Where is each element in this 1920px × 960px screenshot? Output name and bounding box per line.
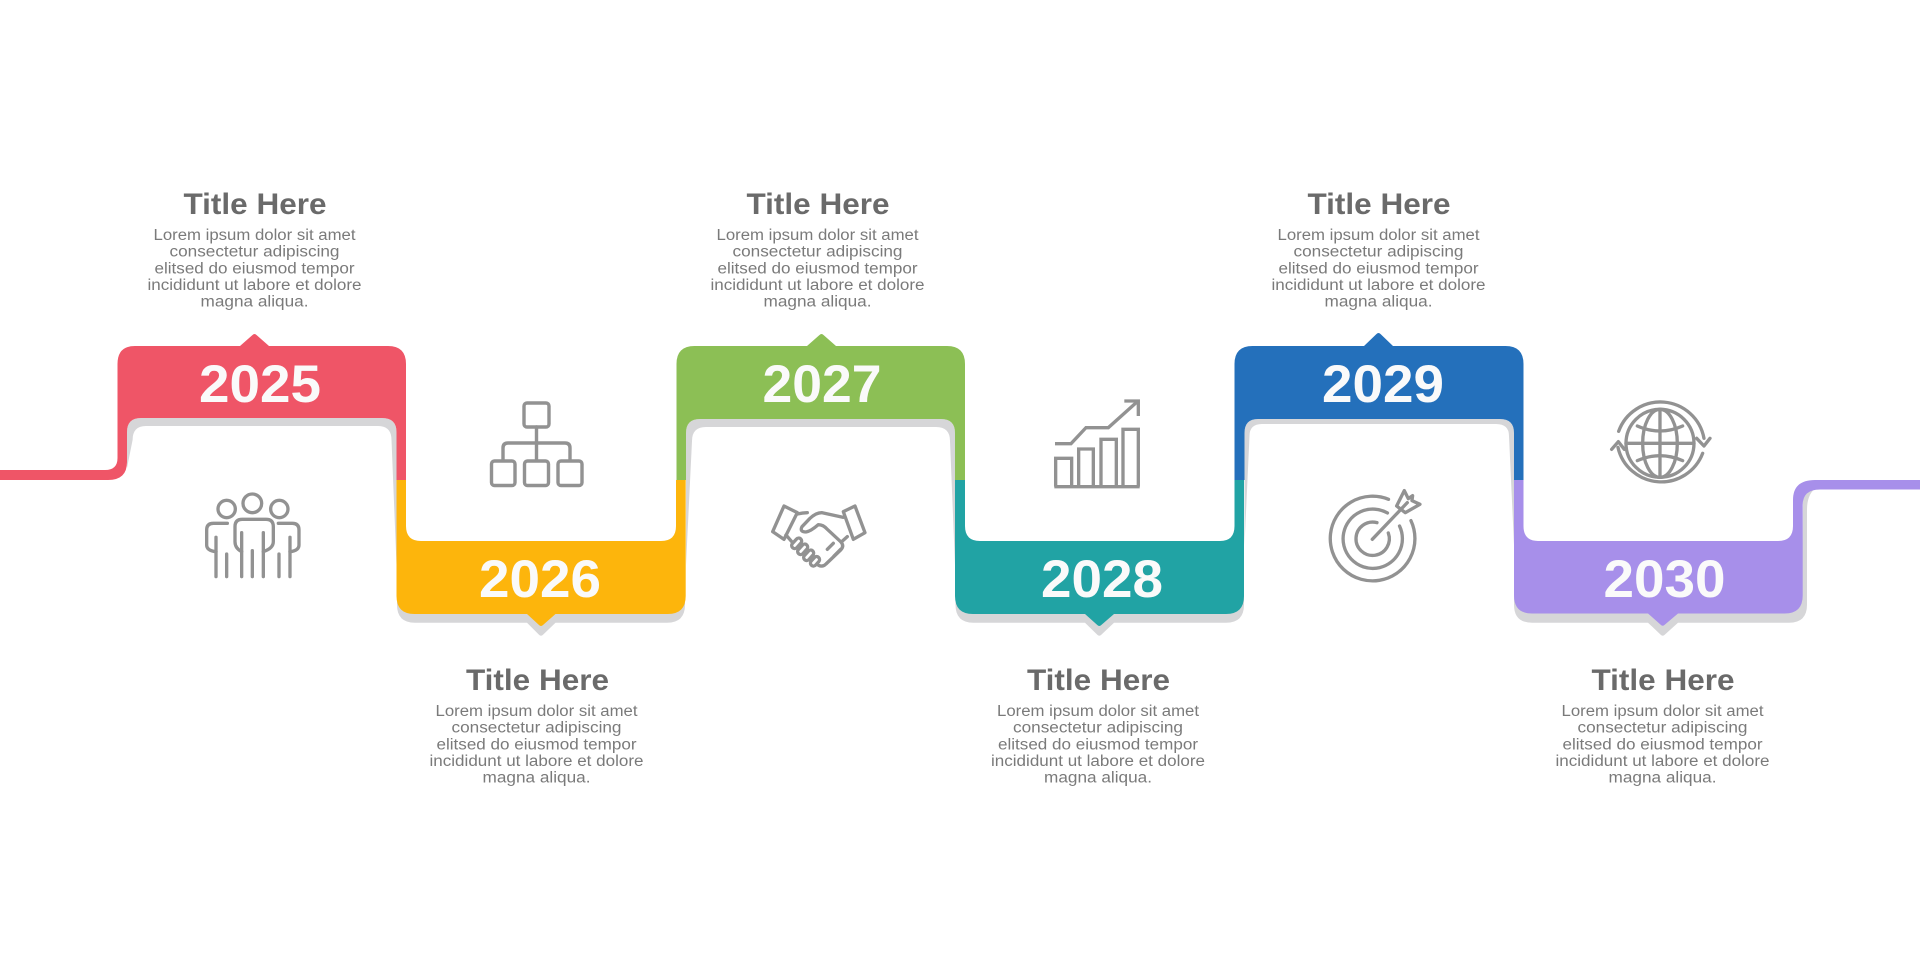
body 2025 xyxy=(148,227,362,311)
icon: handshake xyxy=(773,506,865,567)
body 2029: magna aliqua. xyxy=(1324,294,1432,311)
panel: 2025 step xyxy=(0,334,406,565)
body 2028: elitsed do eiusmod tempor xyxy=(998,736,1198,753)
text block 2030 xyxy=(1556,664,1770,787)
body 2026: incididunt ut labore et dolore xyxy=(430,753,644,770)
panel: 2030 step xyxy=(1514,480,1920,636)
body 2028: magna aliqua. xyxy=(1044,770,1152,787)
year 2025: 2025 xyxy=(199,355,321,414)
body 2028: consectetur adipiscing xyxy=(1013,720,1183,737)
body 2030: consectetur adipiscing xyxy=(1578,720,1748,737)
panel: 2029 step xyxy=(1234,333,1524,545)
body 2027: magna aliqua. xyxy=(764,294,872,311)
body 2026: elitsed do eiusmod tempor xyxy=(436,736,636,753)
body 2025: consectetur adipiscing xyxy=(170,244,340,261)
body 2028 xyxy=(991,703,1205,787)
year 2026: 2026 xyxy=(479,550,601,609)
text block 2027 xyxy=(710,188,924,311)
body 2025: incididunt ut labore et dolore xyxy=(148,277,362,294)
body 2029: incididunt ut labore et dolore xyxy=(1272,277,1486,294)
body 2030: elitsed do eiusmod tempor xyxy=(1562,736,1762,753)
text block 2025 xyxy=(148,188,362,311)
body 2027: Lorem ipsum dolor sit amet xyxy=(716,227,919,244)
icon: people group xyxy=(207,494,299,577)
shadow under 2028 ribbon xyxy=(956,596,1244,636)
body 2029: elitsed do eiusmod tempor xyxy=(1278,260,1478,277)
panel: 2028 step xyxy=(955,480,1244,636)
body 2027: elitsed do eiusmod tempor xyxy=(718,260,918,277)
text block 2029 xyxy=(1272,188,1486,311)
body 2030 xyxy=(1556,703,1770,787)
blue ribbon 2029 xyxy=(1234,333,1524,480)
teal ribbon 2028 xyxy=(955,480,1244,626)
text block 2026 xyxy=(430,664,644,787)
body 2026: consectetur adipiscing xyxy=(452,720,622,737)
icon: growth chart xyxy=(1054,401,1140,487)
body 2025: magna aliqua. xyxy=(200,294,308,311)
heading 2030: Title Here xyxy=(1592,664,1734,697)
purple ribbon 2030 xyxy=(1514,480,1920,626)
heading 2028: Title Here xyxy=(1027,664,1170,697)
shadow under 2027 arch xyxy=(686,419,955,565)
heading 2025: Title Here xyxy=(184,188,326,221)
body 2028: Lorem ipsum dolor sit amet xyxy=(997,703,1200,720)
body 2028: incididunt ut labore et dolore xyxy=(991,753,1205,770)
body 2029: consectetur adipiscing xyxy=(1294,244,1464,261)
icon: rotating globe xyxy=(1612,402,1710,482)
shadow under 2030 ribbon xyxy=(1514,490,1814,636)
year 2027: 2027 xyxy=(762,355,882,414)
red ribbon 2025 xyxy=(0,334,406,480)
icon: org chart xyxy=(492,403,582,486)
year 2030: 2030 xyxy=(1604,550,1726,609)
body 2030: magna aliqua. xyxy=(1608,770,1716,787)
body 2030: Lorem ipsum dolor sit amet xyxy=(1562,703,1764,720)
heading 2027: Title Here xyxy=(746,188,890,221)
body 2027 xyxy=(710,227,924,311)
text block 2028 xyxy=(991,664,1205,787)
body 2027: incididunt ut labore et dolore xyxy=(710,277,924,294)
year 2029: 2029 xyxy=(1322,355,1444,414)
yellow ribbon 2026 xyxy=(396,480,686,626)
body 2027: consectetur adipiscing xyxy=(732,244,902,261)
body 2025: elitsed do eiusmod tempor xyxy=(154,260,354,277)
body 2025: Lorem ipsum dolor sit amet xyxy=(154,227,356,244)
year 2028: 2028 xyxy=(1041,550,1163,609)
shadow under 2026 ribbon xyxy=(397,596,685,636)
panel: 2027 step xyxy=(676,334,965,565)
body 2030: incididunt ut labore et dolore xyxy=(1556,753,1770,770)
body 2029 xyxy=(1272,227,1486,311)
heading 2026: Title Here xyxy=(466,664,609,697)
heading 2029: Title Here xyxy=(1308,188,1450,221)
shadow under 2025 arch xyxy=(127,418,396,565)
panel: 2026 step xyxy=(396,480,686,636)
body 2029: Lorem ipsum dolor sit amet xyxy=(1278,227,1480,244)
body 2026: Lorem ipsum dolor sit amet xyxy=(436,703,638,720)
body 2026: magna aliqua. xyxy=(482,770,590,787)
shadow under 2029 arch xyxy=(1244,419,1514,545)
green ribbon 2027 xyxy=(676,334,965,480)
body 2026 xyxy=(430,703,644,787)
icon: target with arrow xyxy=(1330,491,1420,581)
